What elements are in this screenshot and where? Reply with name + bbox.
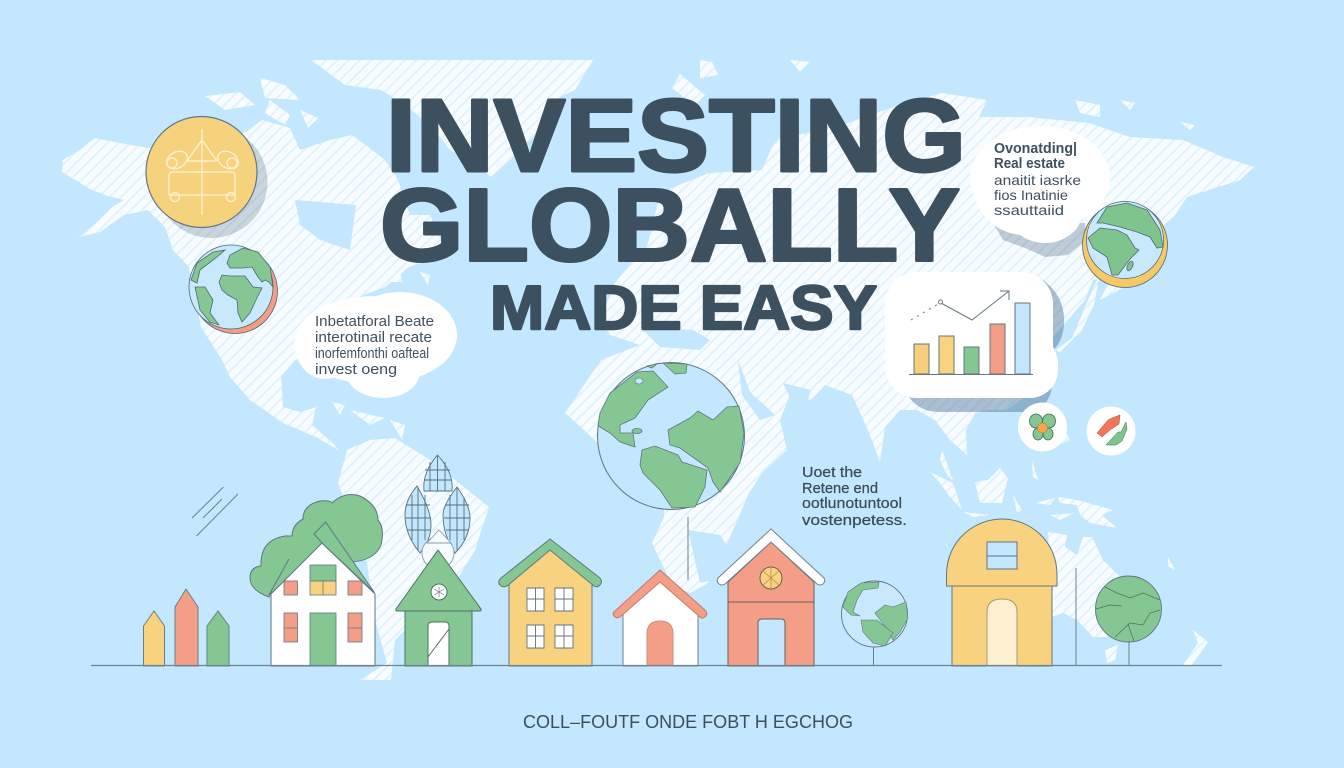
callout: overseas real estate: fios Inatinie bbox=[994, 187, 1068, 203]
illustration: salmon house bbox=[717, 529, 825, 666]
illustration: small spire buildings bbox=[144, 589, 229, 666]
text block: use the real estate note: Uoet the bbox=[802, 464, 862, 481]
callout: international real estate: Inbetatforal Beate bbox=[315, 314, 434, 330]
icon: globe with salmon ring bbox=[189, 245, 278, 334]
title bbox=[380, 78, 966, 343]
callout: international real estate: interotinail recate bbox=[315, 330, 432, 346]
callout: overseas real estate: anaitit iasrke bbox=[994, 172, 1081, 188]
callout: overseas real estate: Real estate bbox=[994, 156, 1065, 172]
callout: international real estate: invest oeng bbox=[315, 362, 397, 378]
text block: use the real estate note bbox=[802, 464, 907, 529]
panel: bar chart card bbox=[885, 272, 1064, 412]
illustration: globe tree bbox=[842, 581, 908, 666]
callout: international real estate bbox=[295, 292, 457, 398]
illustration: yellow icon coin bbox=[146, 116, 268, 238]
ground line bbox=[91, 664, 1222, 666]
footer text: COLL–FOUTF ONDE FOBT H EGCHOG bbox=[523, 711, 853, 732]
title: GLOBALLY bbox=[380, 168, 960, 282]
illustration: sketch lines bbox=[192, 487, 238, 536]
title: MADE EASY bbox=[490, 274, 877, 343]
callout: overseas real estate: ssauttaiid bbox=[994, 202, 1064, 218]
text block: use the real estate note: Retene end bbox=[802, 480, 878, 497]
illustration: yellow barn bbox=[946, 519, 1057, 666]
illustration: yellow house bbox=[499, 539, 602, 666]
illustration: green chapel bbox=[396, 550, 481, 666]
icon: large globe bbox=[598, 362, 744, 510]
callout: international real estate: inorfemfonthi oafteal bbox=[315, 346, 429, 362]
illustration: white house with tree bbox=[250, 495, 382, 666]
callout: overseas real estate: Ovonatding| bbox=[994, 141, 1077, 157]
illustration: green round tree bbox=[1076, 568, 1162, 666]
text block: use the real estate note: ootlunotuntool bbox=[802, 495, 902, 512]
callout: overseas real estate bbox=[970, 126, 1110, 257]
illustration: globe tower leaves bbox=[405, 455, 470, 569]
title: INVESTING bbox=[386, 78, 966, 193]
illustration: salmon-roof cottage bbox=[613, 517, 707, 666]
text block: use the real estate note: vostenpetess. bbox=[802, 512, 907, 529]
icon: globe with yellow ring bbox=[1082, 202, 1168, 288]
world map background bbox=[52, 60, 1254, 680]
chart: rising bars with trend line bbox=[909, 291, 1033, 374]
icon: map pieces badge bbox=[1086, 406, 1136, 456]
icon: green flower badge bbox=[1018, 402, 1067, 452]
